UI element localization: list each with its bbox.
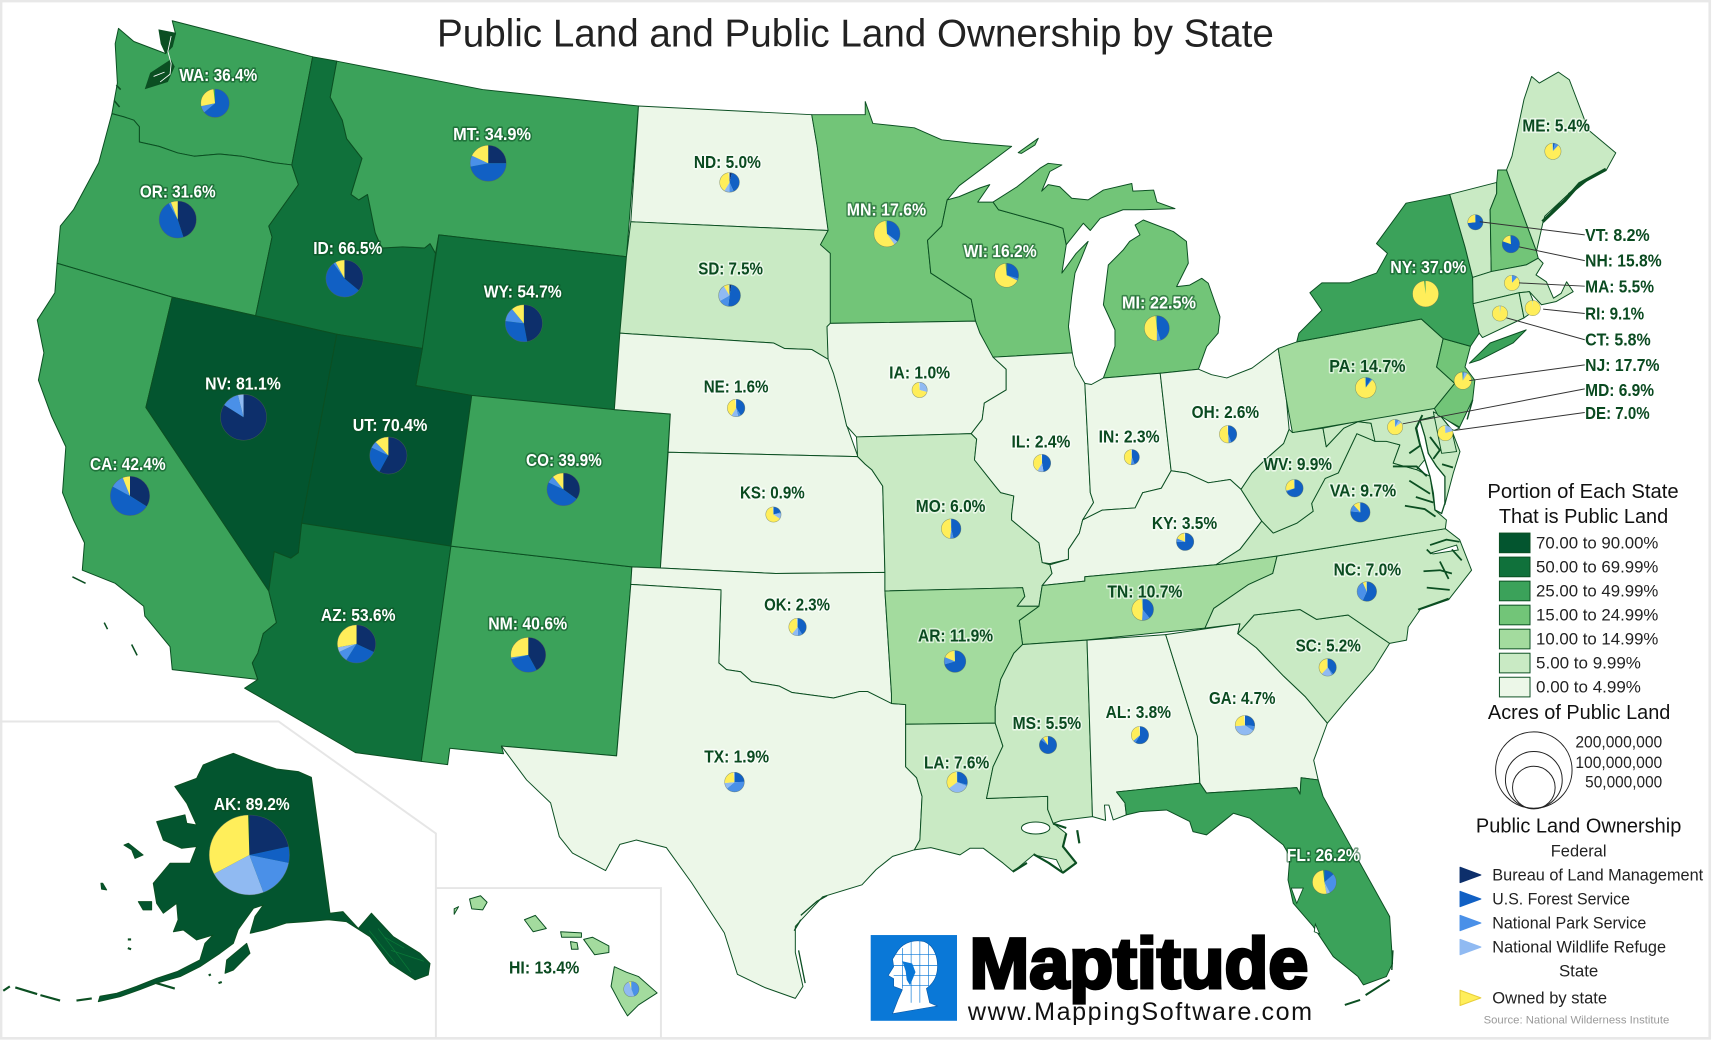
legend: public land ownership: National Wildlife Refuge: [1492, 939, 1666, 957]
label: HI: HI: 13.4%: [509, 957, 580, 977]
legend: public land ownership: Owned by state: [1492, 989, 1607, 1007]
legend: acres of public land: 50,000,000: [1585, 774, 1662, 792]
label: AR: AR: 11.9%: [918, 626, 994, 646]
pie charts: [110, 89, 1561, 997]
pie: PA: [1355, 377, 1376, 398]
pie: SC: [1319, 659, 1336, 676]
label: DE: DE: 7.0%: [1585, 403, 1650, 423]
label: OK: OK: 2.3%: [764, 595, 830, 615]
state: MA: [1473, 258, 1573, 305]
legend: portion of state: 25.00 to 49.99%: [1536, 582, 1658, 600]
legend heading: Portion of Each State: [1487, 480, 1679, 503]
pie: NH: [1502, 235, 1520, 253]
state: KY: [1042, 471, 1262, 585]
legend: public land ownership: Federal: [1551, 842, 1606, 860]
label: WV: WV: 9.9%: [1263, 454, 1332, 474]
state: AK St Lawrence: [124, 843, 143, 858]
pie: NJ: [1454, 372, 1472, 389]
state: HI Lanai: [570, 942, 578, 949]
state: HI Maui: [584, 937, 609, 955]
acres heading: Acres of Public Land: [1488, 701, 1670, 724]
source: Source: National Wilderness Institute: [1484, 1015, 1669, 1027]
label: AL: AL: 3.8%: [1106, 702, 1171, 722]
state: IN: [1083, 373, 1171, 520]
state: NY: [1297, 194, 1479, 346]
label: GA: GA: 4.7%: [1209, 688, 1276, 708]
pie: NC: [1357, 582, 1377, 601]
label: KS: KS: 0.9%: [740, 483, 805, 503]
state: NV: [146, 297, 337, 591]
pie: CO: [547, 473, 580, 506]
label: NY: NY: 37.0%: [1390, 257, 1467, 277]
state: PA: [1278, 319, 1455, 433]
legend: public land ownership: U.S. Forest Service: [1492, 890, 1630, 908]
label: ID: ID: 66.5%: [313, 238, 383, 258]
pie: DE: [1438, 425, 1453, 441]
state: NC: [1205, 529, 1472, 643]
pie: LA: [947, 772, 967, 792]
state: TX: [501, 584, 922, 998]
state: GA: [1166, 624, 1327, 794]
state: HI Oahu: [524, 915, 546, 932]
state: WA: [112, 21, 313, 165]
pie: SD: [719, 285, 741, 306]
legend: public land ownership: Bureau of Land Management: [1492, 866, 1704, 884]
pie: ME: [1545, 143, 1561, 159]
label: CT: CT: 5.8%: [1585, 330, 1651, 350]
label: NV: NV: 81.1%: [205, 373, 281, 393]
state: SD: [620, 222, 830, 359]
state: AZ: [245, 523, 451, 761]
pie: OR: [159, 201, 196, 238]
legend: portion of state: [1487, 480, 1679, 697]
state: VT: [1450, 182, 1497, 277]
label: OH: OH: 2.6%: [1192, 402, 1260, 422]
pie: WV: [1286, 480, 1303, 497]
state: MO: [856, 434, 1052, 606]
state: WI: [928, 185, 1088, 357]
state: ME: [1507, 72, 1616, 251]
state: NE: [614, 333, 858, 457]
icon: state: [1460, 990, 1481, 1005]
pie: TN: [1132, 599, 1154, 620]
pie: ID: [326, 260, 363, 297]
state: MI lower: [1103, 220, 1220, 378]
pie: RI: [1525, 300, 1540, 316]
logo: Maptitude: [871, 925, 1312, 1026]
state: AR: [885, 588, 1039, 724]
pie: KY: [1176, 533, 1194, 551]
pie: IN: [1124, 449, 1139, 465]
label: IL: IL: 2.4%: [1012, 431, 1071, 451]
state: MD and VA eastern shore: [1420, 415, 1460, 505]
label: MT: MT: 34.9%: [453, 124, 531, 144]
pie: UT: [370, 437, 407, 474]
state: IL: [971, 353, 1094, 564]
state: LA: [906, 723, 1076, 873]
label: WI: WI: 16.2%: [964, 241, 1037, 261]
pie: WY: [505, 305, 542, 342]
state: CA: [37, 263, 276, 679]
pie: AL: [1131, 726, 1149, 744]
state: AK Nunivak: [138, 902, 152, 910]
pie: MS: [1039, 736, 1057, 754]
label: NE: NE: 1.6%: [704, 377, 769, 397]
label: ND: ND: 5.0%: [694, 152, 761, 172]
state: HI Molokai: [561, 932, 581, 937]
pie: NV: [221, 394, 267, 440]
label: MA: MA: 5.5%: [1585, 277, 1654, 297]
pie: TX: [725, 772, 744, 792]
state: MN: [812, 102, 1012, 323]
label: CA: CA: 42.4%: [90, 454, 166, 474]
pie: MI: [1144, 316, 1169, 341]
state: ID: [256, 57, 436, 348]
pie: GA: [1235, 715, 1255, 735]
legend: public land ownership: State: [1559, 963, 1598, 981]
state: IA: [827, 321, 1006, 437]
pie: ND: [720, 173, 739, 192]
legend: acres of public land: 100,000,000: [1575, 754, 1662, 772]
state: OH: [1160, 348, 1289, 489]
label: FL: FL: 26.2%: [1287, 845, 1360, 865]
state: NM: [421, 546, 632, 765]
Puget Sound islands: [146, 30, 176, 88]
label: OR: OR: 31.6%: [140, 182, 216, 202]
pie: VT: [1468, 215, 1483, 230]
label: MO: MO: 6.0%: [916, 496, 986, 516]
pie: AZ: [337, 625, 376, 663]
logo wordmark: Maptitude: [970, 925, 1308, 1004]
state: ND: [631, 106, 828, 230]
state: HI Big Island: [611, 967, 657, 1016]
state: CO: [451, 395, 670, 568]
legend: portion of state: 5.00 to 9.99%: [1536, 655, 1641, 673]
label: IN: IN: 2.3%: [1099, 426, 1160, 446]
Chesapeake Bay: [1417, 420, 1445, 513]
state: WY: [416, 235, 626, 410]
state: AK Kodiak: [225, 943, 250, 973]
pie: VA: [1351, 502, 1370, 522]
label: PA: PA: 14.7%: [1329, 356, 1406, 376]
legend heading line 2: That is Public Land: [1499, 505, 1668, 528]
label: AZ: AZ: 53.6%: [321, 605, 396, 625]
icon: USFS: [1460, 891, 1481, 907]
label: LA: LA: 7.6%: [924, 752, 990, 772]
pie: CA: [110, 476, 150, 516]
state: AL: [1087, 635, 1200, 820]
pie: HI: [624, 981, 639, 997]
state: HI Niihau: [454, 907, 459, 914]
label: VT: VT: 8.2%: [1585, 225, 1650, 245]
pie: CT: [1492, 306, 1508, 321]
label: RI: RI: 9.1%: [1585, 304, 1645, 324]
pie: OK: [789, 618, 806, 636]
icon: FWS: [1460, 939, 1481, 955]
legend: portion of state: 15.00 to 24.99%: [1536, 606, 1658, 624]
label: KY: KY: 3.5%: [1152, 513, 1218, 533]
legend: portion of state: 50.00 to 69.99%: [1536, 558, 1658, 576]
state: AK: [98, 753, 430, 1002]
state: MD: [1323, 407, 1440, 470]
pie: MA: [1504, 275, 1520, 291]
pie: AK: [209, 815, 290, 895]
label: NJ: NJ: 17.7%: [1585, 355, 1660, 375]
label: MN: MN: 17.6%: [847, 200, 927, 220]
ownership heading: Public Land Ownership: [1476, 814, 1681, 837]
state: WV: [1241, 422, 1375, 533]
label: AK: AK: 89.2%: [214, 794, 290, 814]
pie: NY: [1413, 281, 1439, 307]
pie: MN: [874, 221, 900, 247]
state: NY Long Island: [1469, 330, 1526, 363]
legend: acres of public land: 200,000,000: [1575, 734, 1662, 752]
state: RI: [1519, 292, 1536, 318]
legend: public land ownership: [1460, 814, 1704, 1007]
pie: WI: [995, 263, 1019, 287]
state: MI upper: [993, 163, 1175, 245]
pie: OH: [1219, 425, 1237, 443]
label: MI: MI: 22.5%: [1122, 293, 1196, 313]
label: UT: UT: 70.4%: [353, 415, 428, 435]
label: VA: VA: 9.7%: [1330, 480, 1397, 500]
pie: AR: [944, 650, 966, 672]
logo icon: [871, 935, 957, 1021]
label: WY: WY: 54.7%: [484, 282, 562, 302]
state: AK St Matthew: [101, 883, 107, 890]
label: NH: NH: 15.8%: [1585, 251, 1662, 271]
legend: portion of state: 70.00 to 90.00%: [1536, 534, 1658, 552]
label: NC: NC: 7.0%: [1334, 560, 1402, 580]
icon: BLM: [1460, 867, 1481, 883]
state: OR: [57, 114, 298, 316]
label: MD: MD: 6.9%: [1585, 380, 1654, 400]
pie: IA: [912, 382, 927, 398]
pie: KS: [766, 507, 781, 522]
state: UT: [302, 334, 472, 546]
pie: MD: [1387, 419, 1403, 435]
label: MS: MS: 5.5%: [1013, 713, 1082, 733]
legend: public land ownership: National Park Service: [1492, 914, 1646, 932]
pie: WA: [201, 89, 229, 117]
state: MT: [330, 61, 638, 257]
label: TX: TX: 1.9%: [704, 746, 769, 766]
title: Public Land and Public Land Ownership by State: [437, 11, 1274, 55]
pie: NE: [727, 399, 745, 417]
pie: NM: [511, 637, 546, 672]
pie: MT: [470, 145, 506, 181]
label: ME: ME: 5.4%: [1522, 116, 1590, 136]
state: DE: [1433, 412, 1457, 453]
state: VA: [1216, 434, 1446, 565]
state: SC: [1238, 610, 1390, 723]
icon: NPS: [1460, 915, 1481, 931]
state: NJ: [1434, 339, 1475, 427]
label: SD: SD: 7.5%: [698, 259, 763, 279]
leader lines: [1403, 222, 1585, 430]
state: OK: [631, 567, 891, 703]
label: WA: WA: 36.4%: [179, 65, 258, 85]
pie: MO: [941, 519, 961, 539]
label: SC: SC: 5.2%: [1296, 636, 1361, 656]
state: FL: [1117, 778, 1393, 985]
legend: portion of state: 0.00 to 4.99%: [1536, 679, 1641, 697]
state: TN: [1019, 556, 1277, 644]
pie: FL: [1312, 870, 1336, 894]
legend: acres of public land: [1488, 701, 1670, 809]
state: CT: [1473, 293, 1524, 338]
state: NH: [1490, 170, 1538, 272]
state: HI Kauai: [470, 896, 487, 910]
label: NM: NM: 40.6%: [488, 614, 568, 634]
state: KS: [660, 452, 885, 573]
label: TN: TN: 10.7%: [1107, 581, 1183, 602]
legend: portion of state: 10.00 to 14.99%: [1536, 630, 1658, 648]
state: MS: [987, 640, 1092, 823]
pie: IL: [1033, 454, 1051, 472]
state: MI Isle Royale: [1018, 138, 1038, 153]
label: IA: IA: 1.0%: [889, 362, 951, 383]
logo url: www.MappingSoftware.com: [967, 998, 1312, 1026]
label: CO: CO: 39.9%: [526, 450, 602, 470]
